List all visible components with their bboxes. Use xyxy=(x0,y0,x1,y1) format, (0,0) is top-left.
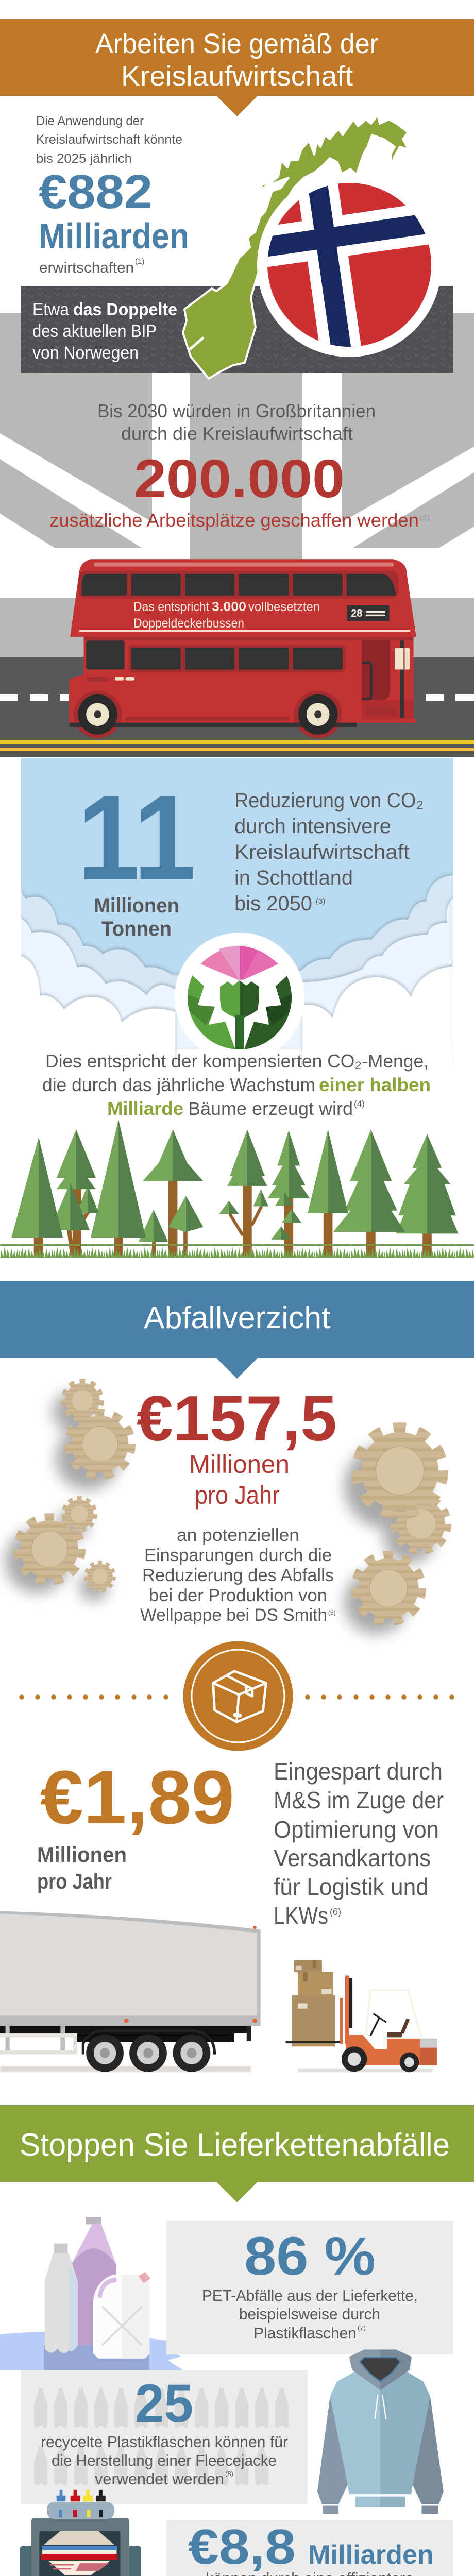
illustration: cardboard gears xyxy=(5,1382,447,1634)
panel: 86 percent PET waste xyxy=(166,2221,453,2354)
big number: 8.8 billion: Milliarden xyxy=(308,2540,434,2570)
text: savings description: bei der Produktion von xyxy=(149,1586,327,1605)
text: savings description xyxy=(140,1526,336,1625)
illustration: printing press xyxy=(20,2490,179,2576)
big number: 8.8 billion: €8,8 xyxy=(188,2519,296,2574)
big number: 1.89 million: Millionen xyxy=(37,1842,127,1867)
big number: 11 million tonnes: 11 xyxy=(77,770,196,905)
illustration: plastic bottles in puddle xyxy=(0,2217,183,2370)
caption: erwirtschaften: (1) xyxy=(135,257,144,266)
text: double GDP: Etwa xyxy=(32,300,69,319)
heading xyxy=(95,28,379,92)
text: fleece jacket: die Herstellung einer Fleecejacke xyxy=(52,2451,277,2469)
big number: 882 billion xyxy=(39,165,189,256)
section header: Lieferkettenabfälle xyxy=(0,2105,474,2202)
big number: 11 million tonnes: Tonnen xyxy=(101,918,172,940)
icon: map of Norway xyxy=(183,115,409,379)
text: M&S savings xyxy=(274,1758,444,1929)
text: half a billion trees: die durch das jährliche Wachstum xyxy=(42,1074,315,1095)
big number: 157.5 million: pro Jahr xyxy=(195,1481,280,1510)
text: PET waste xyxy=(202,2286,418,2342)
illustration: red double decker bus xyxy=(69,559,416,738)
text: PET waste: Plastikflaschen xyxy=(253,2324,357,2342)
intro text block xyxy=(36,114,182,166)
text: half a billion trees: Dies entspricht der kompensierten CO₂-Menge, xyxy=(45,1050,429,1072)
text: UK jobs xyxy=(49,400,429,531)
panel: Scottish sky with clouds xyxy=(21,758,453,1081)
intro text block: bis 2025 jährlich xyxy=(36,151,132,166)
text: CO2 reduction in Scotland: (3) xyxy=(316,897,325,906)
panel: 25 recycled bottles xyxy=(21,2370,308,2504)
section header: Kreislaufwirtschaft xyxy=(0,19,474,116)
text: CO2 reduction in Scotland xyxy=(234,789,424,915)
text: savings description: Wellpappe bei DS Smith xyxy=(140,1605,327,1625)
text: M&S savings: Versandkartons xyxy=(274,1844,431,1871)
union jack background xyxy=(0,313,474,657)
text: fleece jacket: verwendet werden xyxy=(95,2470,224,2488)
heading: Stoppen Sie Lieferkettenabfälle xyxy=(20,2127,450,2163)
big number: 157.5 million xyxy=(137,1383,337,1510)
big number: 882 billion: Milliarden xyxy=(39,216,189,256)
big number: 1.89 million: pro Jahr xyxy=(37,1869,112,1893)
text: fleece jacket: recycelte Plastikflaschen können für xyxy=(41,2433,288,2451)
text: half a billion trees: Bäume erzeugt wird xyxy=(188,1098,353,1119)
bus text: Das entspricht xyxy=(133,600,209,614)
panel: 8.8 billion paper xyxy=(166,2519,453,2576)
caption: erwirtschaften: erwirtschaften xyxy=(39,260,134,276)
bus text: 28 xyxy=(351,608,362,619)
text: UK jobs: Bis 2030 würden in Großbritannien xyxy=(97,400,376,421)
text: M&S savings: Eingespart durch xyxy=(274,1758,443,1785)
heading: Abfallverzicht xyxy=(144,1300,330,1335)
bus text: Doppeldeckerbussen xyxy=(133,616,244,631)
illustration: forklift with boxes xyxy=(285,1960,437,2072)
panel: GDP of Norway xyxy=(21,286,453,373)
text: PET waste: PET-Abfälle aus der Lieferkette, xyxy=(202,2286,418,2304)
bus text xyxy=(133,600,362,631)
text: double GDP: von Norwegen xyxy=(32,343,139,363)
text: savings description: Einsparungen durch die xyxy=(144,1546,332,1565)
text: CO2 reduction in Scotland: bis 2050 xyxy=(234,892,312,915)
section header: Abfallverzicht xyxy=(0,1281,474,1379)
text: CO2 reduction in Scotland: Reduzierung von CO₂ xyxy=(234,789,424,812)
text: M&S savings: Optimierung von xyxy=(274,1816,439,1843)
text: M&S savings: LKWs xyxy=(274,1902,328,1929)
illustration: truck trailer xyxy=(0,1911,261,2072)
text: double GDP: des aktuellen BIP xyxy=(32,321,157,341)
text: UK jobs: zusätzliche Arbeitsplätze geschaffen werden xyxy=(49,510,419,531)
text: half a billion trees: (4) xyxy=(354,1099,365,1109)
big number: 25: 25 xyxy=(135,2374,193,2434)
intro text block: Kreislaufwirtschaft könnte xyxy=(36,132,182,147)
bus text: vollbesetzten xyxy=(248,600,320,614)
text: fleece jacket: (8) xyxy=(225,2470,233,2478)
heading: Kreislaufwirtschaft xyxy=(121,61,353,92)
text: PET waste: beispielsweise durch xyxy=(239,2305,380,2323)
text: savings description: (5) xyxy=(328,1609,336,1616)
text: savings description: an potenziellen xyxy=(177,1526,299,1545)
text: CO2 reduction in Scotland: Kreislaufwirtschaft xyxy=(234,841,410,863)
text: half a billion trees: einer halben xyxy=(319,1074,431,1095)
text: M&S savings: für Logistik und xyxy=(274,1873,429,1900)
big number: 157.5 million: Millionen xyxy=(189,1450,290,1479)
text: half a billion trees: Milliarde xyxy=(107,1098,183,1119)
bus text: 3.000 xyxy=(212,600,246,614)
illustration: forest xyxy=(0,1120,474,1258)
icon: cardboard box xyxy=(183,1641,293,1751)
big number: 157.5 million: €157,5 xyxy=(137,1383,337,1454)
text: UK jobs: (2) xyxy=(420,514,429,522)
heading: Arbeiten Sie gemäß der xyxy=(95,28,379,59)
icon: thistle xyxy=(175,933,304,1062)
big number: 86 percent: 86 % xyxy=(244,2226,376,2286)
dotted divider with box icon xyxy=(19,1641,454,1751)
text: UK jobs: durch die Kreislaufwirtschaft xyxy=(121,423,353,444)
intro text block: Die Anwendung der xyxy=(36,114,144,128)
text: CO2 reduction in Scotland: in Schottland xyxy=(234,867,353,889)
text: double GDP xyxy=(32,300,177,363)
bottle silhouettes xyxy=(34,2388,289,2485)
big number: 1.89 million xyxy=(37,1755,234,1893)
illustration: fleece jacket xyxy=(317,2350,444,2514)
big number: 200.000: 200.000 xyxy=(134,449,345,509)
text: M&S savings: M&S im Zuge der xyxy=(274,1787,444,1814)
text: savings description: Reduzierung des Abfalls xyxy=(142,1566,334,1585)
road xyxy=(0,657,474,757)
big number: 882 billion: €882 xyxy=(39,165,153,218)
big number: 1.89 million: €1,89 xyxy=(40,1755,234,1840)
text: half a billion trees xyxy=(42,1050,431,1119)
icon: Norwegian flag circle xyxy=(257,173,443,361)
text: M&S savings: (6) xyxy=(330,1907,341,1917)
text: CO2 reduction in Scotland: durch intensivere xyxy=(234,815,391,838)
text: fleece jacket xyxy=(41,2433,288,2488)
text: PET waste: (7) xyxy=(358,2324,366,2332)
text: double GDP: das Doppelte xyxy=(73,300,177,319)
big number: 11 million tonnes: Millionen xyxy=(94,894,179,917)
big number: 8.8 billion xyxy=(188,2519,434,2574)
